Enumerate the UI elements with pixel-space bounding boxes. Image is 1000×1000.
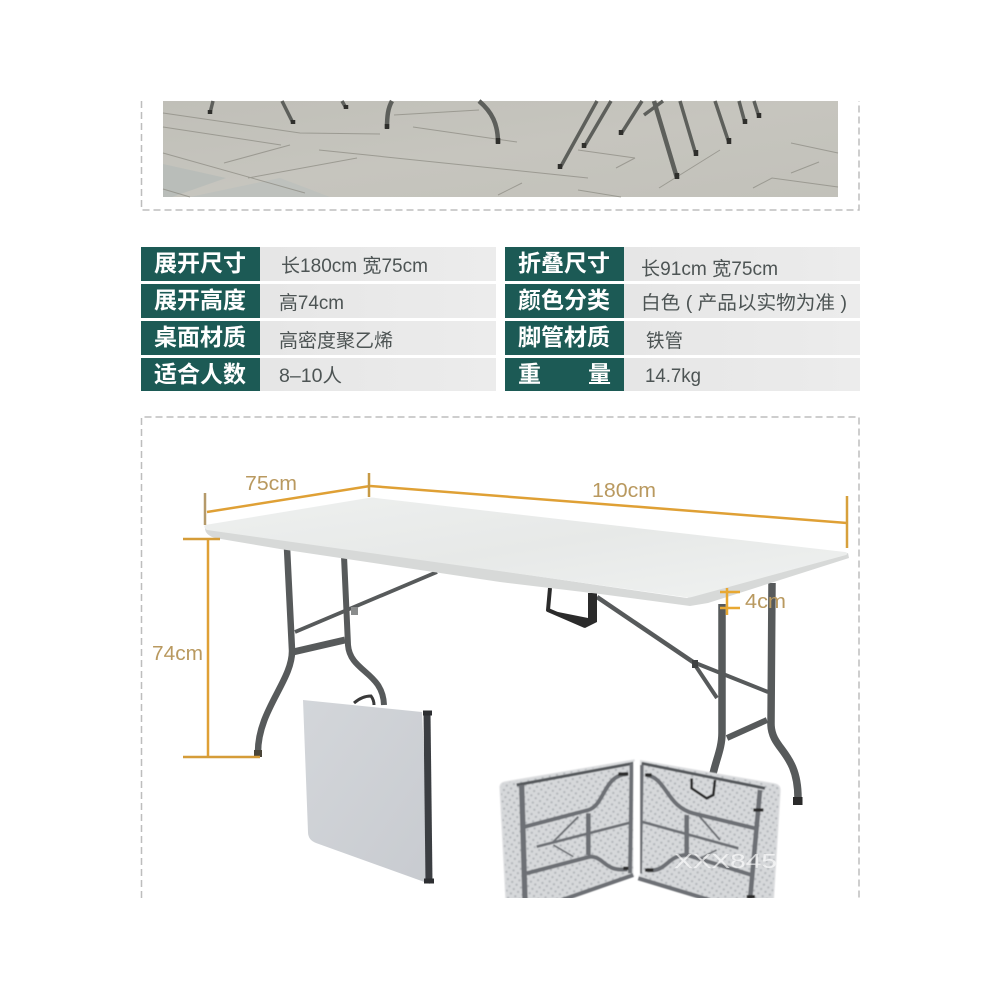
row: 展开高度: 展开高度 [154, 287, 246, 313]
row: 折叠尺寸 [505, 247, 860, 281]
table top [204, 498, 849, 606]
row: 适合人数: 8–10人 [279, 365, 342, 387]
photo leg feet [210, 105, 759, 179]
dimension 4cm [720, 588, 786, 615]
photo: table legs on paving [163, 101, 838, 197]
top dashed frame [142, 101, 859, 210]
row: 展开尺寸: 展开尺寸 [154, 250, 246, 276]
dimension 75cm [205, 473, 370, 525]
row: 脚管材质: 脚管材质 [518, 324, 610, 350]
row: 脚管材质 [505, 321, 860, 355]
dimension 180cm [370, 480, 847, 548]
row: 桌面材质: 高密度聚乙烯 [279, 330, 393, 352]
dimension 74cm: 74cm [152, 643, 203, 665]
row: 重量: 重 [518, 361, 541, 387]
dimension 74cm [152, 539, 260, 757]
row: 桌面材质: 桌面材质 [154, 324, 246, 350]
photo legs [210, 101, 759, 178]
row: 重量 [505, 358, 860, 391]
row: 展开高度: 高74cm [279, 292, 344, 314]
dimension 4cm: 4cm [745, 591, 786, 613]
row: 颜色分类: 白色 ( 产品以实物为准 ) [641, 292, 847, 314]
row: 折叠尺寸: 折叠尺寸 [518, 250, 610, 276]
row: 折叠尺寸: 长91cm 宽75cm [641, 258, 778, 280]
row: 脚管材质: 铁管 [646, 330, 683, 352]
open table underside [500, 760, 780, 900]
row: 桌面材质 [141, 321, 496, 355]
dimension 75cm: 75cm [245, 473, 297, 495]
row: 展开尺寸 [141, 247, 496, 281]
row: 颜色分类 [505, 284, 860, 318]
row: 适合人数 [141, 358, 496, 391]
lower dashed frame [142, 417, 859, 898]
table edge [205, 528, 849, 606]
row: 展开尺寸: 长180cm 宽75cm [281, 255, 428, 277]
folded handle [354, 696, 374, 705]
dimension 180cm: 180cm [592, 480, 656, 502]
right table legs and brace [597, 583, 802, 805]
spec table [141, 247, 860, 391]
table surface [204, 498, 847, 598]
folded table [303, 696, 434, 884]
row: 重量: 量 [588, 361, 611, 387]
row: 颜色分类: 颜色分类 [518, 287, 610, 313]
row: 重量: 14.7kg [645, 366, 701, 387]
left table legs [254, 548, 437, 757]
row: 展开高度 [141, 284, 496, 318]
row: 适合人数: 适合人数 [154, 361, 246, 387]
watermark: XXX845 [674, 851, 777, 873]
carry handle [548, 588, 597, 628]
